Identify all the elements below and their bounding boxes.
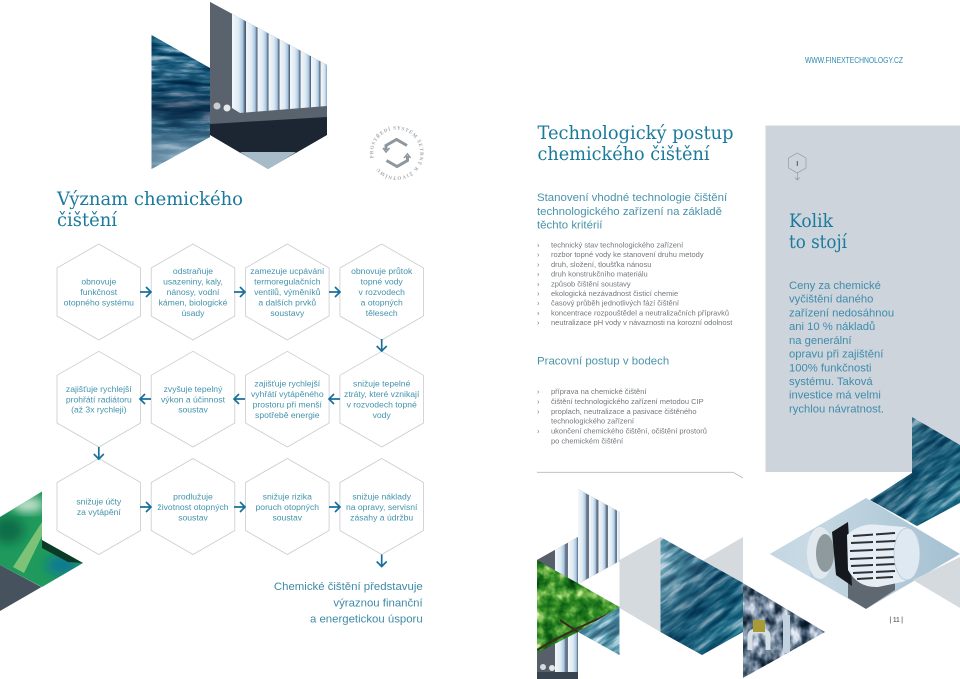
list: procedure: technologického zařízení (551, 416, 635, 426)
panel body text: systému. Taková (789, 376, 873, 388)
panel body text: opravu při zajištění (789, 348, 884, 360)
list: criteria: › (537, 279, 540, 288)
list: procedure: › (537, 397, 540, 406)
hexagon 3: termoregulačních (254, 276, 321, 286)
hexagon 2: usazeniny, kaly, (163, 276, 223, 286)
hexagon 2: odstraňuje (173, 266, 213, 276)
panel body text (789, 280, 894, 415)
badge: eco stamp (370, 126, 424, 180)
title: right: chemického čištění (538, 143, 710, 165)
subheading: criteria: těchto kritérií (537, 220, 603, 232)
hexagon 6: soustav (178, 405, 209, 415)
hexagon 8: v rozvodech topné (347, 400, 417, 410)
hexagon 12: na opravy, servisní (346, 502, 418, 512)
conclusion text (274, 581, 424, 626)
hexagon 5: zajišťuje rychlejší (66, 384, 132, 394)
list: procedure: po chemickém čištění (551, 436, 624, 446)
hexagon 10: životnost otopných (157, 502, 229, 512)
hexagon 6: výkon a účinnost (161, 394, 226, 404)
hexagon 4: a otopných (361, 298, 403, 308)
list: procedure: proplach, neutralizace a pasivace čištěného (551, 407, 697, 416)
hexagon 7: zajišťuje rychlejší (254, 379, 321, 389)
list: procedure: › (537, 387, 540, 396)
hexagon 4 (340, 244, 424, 340)
panel heading: to stojí (789, 231, 848, 253)
hexagon 8 (340, 351, 424, 447)
arrows: flow between hexagons (94, 287, 387, 566)
hexagon 3: a dalších prvků (258, 298, 316, 308)
panel body text: ani 10 % nákladů (789, 321, 875, 333)
stamp circular text: PROSTŘEDÍ SYSTÉM ŠETRNÝ K ŽIVOTNÍMU (370, 126, 424, 180)
hexagon 11 (246, 458, 329, 554)
hexagon 4: v rozvodech (359, 287, 405, 297)
image: radiator lower (537, 489, 620, 679)
list: criteria: › (537, 240, 540, 250)
hexagon 7 (246, 351, 329, 447)
panel body text: zařízení nedosáhnou (789, 307, 894, 319)
hexagon 5: (až 3x rychleji) (71, 405, 127, 415)
panel body text: 100% funkčnosti (789, 362, 872, 374)
shape: grey triangle (702, 537, 743, 583)
title: right: Technologický postup (538, 122, 734, 144)
list: criteria: rozbor topné vody ke stanovení druhu metody (551, 250, 704, 259)
title: left (56, 188, 243, 231)
image: leaf (0, 490, 84, 590)
list: criteria: neutralizace pH vody v návaznosti na korozní odolnost (551, 318, 733, 327)
conclusion text: a energetickou úsporu (310, 614, 423, 626)
list: criteria: › (537, 270, 540, 279)
hexagon 10: prodlužuje (173, 492, 213, 502)
hexagon 3: ventilů, výměníků (254, 287, 321, 297)
panel heading: Kolik (789, 210, 833, 232)
image: small water triangle (578, 607, 620, 655)
hexagon 2 (151, 244, 235, 340)
hexagon 1 (57, 244, 141, 340)
subheading: procedure: Pracovní postup v bodech (537, 356, 669, 368)
page number: | 11 | (890, 617, 903, 624)
list: criteria: způsob čištění soustavy (551, 279, 631, 288)
hexagon 9: za vytápění (77, 507, 121, 517)
list: procedure: čištění technologického zařízení metodou CIP (551, 397, 704, 406)
hexagon 4: tělesech (366, 308, 398, 318)
panel body text: investice má velmi (789, 390, 881, 402)
hexagon 7: spotřebě energie (255, 410, 320, 420)
hexagon 9: snižuje účty (76, 497, 122, 507)
list: criteria: ekologická nezávadnost čisticí chemie (551, 289, 678, 298)
hexagon 11: poruch otopných (256, 502, 319, 512)
panel body text: Ceny za chemické (789, 280, 881, 292)
hexagon 1: otopného systému (64, 298, 134, 308)
title: left: Význam chemického (56, 188, 243, 210)
list: criteria: technický stav technologického zařízení (551, 240, 684, 250)
list: procedure: › (537, 426, 540, 436)
list: criteria: › (537, 299, 540, 308)
triangle: grey right (913, 557, 960, 608)
list: criteria (537, 240, 733, 327)
list: criteria: › (537, 289, 540, 298)
list: criteria: koncentrace rozpouštědel a neutralizačních přípravků (551, 308, 729, 317)
hexagon 3: zamezuje ucpávání (250, 266, 325, 276)
hexagon 11: snižuje rizika (263, 492, 312, 502)
hexagon 12: zásahy a údržbu (350, 512, 413, 522)
hexagon 1: obnovuje (81, 277, 116, 287)
image: thermostat (770, 498, 960, 609)
hexagon 11: soustav (272, 512, 303, 522)
list: procedure: příprava na chemické čištění (551, 387, 647, 396)
title: right (538, 122, 734, 165)
shape: grey hexagon piece (620, 537, 660, 632)
hexagon 4: obnovuje průtok (351, 266, 413, 276)
hexagon 7: prostoru při menší (253, 400, 323, 410)
hexagon 8: snižuje tepelné (353, 379, 411, 389)
icon: info hexagon (788, 153, 806, 180)
panel body text: rychlou návratnost. (789, 403, 884, 415)
panel body text: vyčištění daného (789, 294, 873, 306)
conclusion text: výraznou finanční (333, 597, 424, 609)
hexagon 5 (57, 351, 141, 447)
list: criteria: druh, složení, tloušťka nánosu (551, 260, 651, 269)
list: criteria: › (537, 250, 540, 259)
hexagon 3 (246, 244, 329, 340)
hexagon 3: soustavy (270, 308, 305, 318)
list: procedure: ukončení chemického čištění, očištění prostorů (551, 426, 707, 436)
conclusion text: Chemické čištění představuje (274, 581, 423, 593)
hexagon 10 (151, 458, 235, 554)
list: criteria: › (537, 260, 540, 269)
image: radiator (210, 0, 330, 172)
hexagon 2: nánosy, vodní (167, 287, 220, 297)
subheading: criteria: Stanovení vhodné technologie čištění (537, 192, 728, 204)
panel heading (789, 210, 848, 253)
image: tree (537, 558, 621, 655)
stamp recycle hexagon (383, 140, 410, 166)
hexagon 9 (57, 458, 141, 554)
list: procedure: › (537, 407, 540, 416)
list: criteria: časový průběh jednotlivých fází čištění (551, 299, 680, 308)
hexagon 4: topné vody (361, 276, 403, 286)
hexagon 5: prohřátí radiátoru (66, 394, 132, 404)
hexagon 6 (151, 351, 235, 447)
panel body text: na generální (789, 335, 852, 347)
hexagon 2: kámen, biologické (159, 298, 228, 308)
image: water upper right (870, 417, 960, 526)
panel: cost (766, 126, 960, 472)
subheading: criteria: technologického zařízení na základě (537, 206, 722, 218)
hexagon 2: úsady (182, 308, 205, 318)
leaf grey triangle (0, 565, 42, 611)
list: criteria: druh konstrukčního materiálu (551, 270, 648, 279)
image: pipes (743, 583, 826, 679)
hexagon 10: soustav (178, 512, 209, 522)
list: criteria: › (537, 318, 540, 327)
list: criteria: › (537, 308, 540, 317)
hexagon 6: zvyšuje tepelný (164, 384, 223, 394)
image: large water (660, 537, 743, 655)
subheading: criteria (537, 192, 728, 232)
website url: WWW.FINEXTECHNOLOGY.CZ (805, 56, 903, 65)
hexagon 7: vyhřátí vytápěného (251, 389, 324, 399)
list: procedure (537, 387, 707, 446)
hexagon 12 (340, 458, 424, 554)
hexagon 8: ztráty, které vznikají (344, 389, 420, 399)
image: water triangle (150, 33, 212, 171)
title: left: čištění (57, 209, 118, 231)
hexagon 1: funkčnost (80, 287, 118, 297)
hexagon 12: snižuje náklady (352, 492, 412, 502)
hexagon 8: vody (373, 410, 391, 420)
